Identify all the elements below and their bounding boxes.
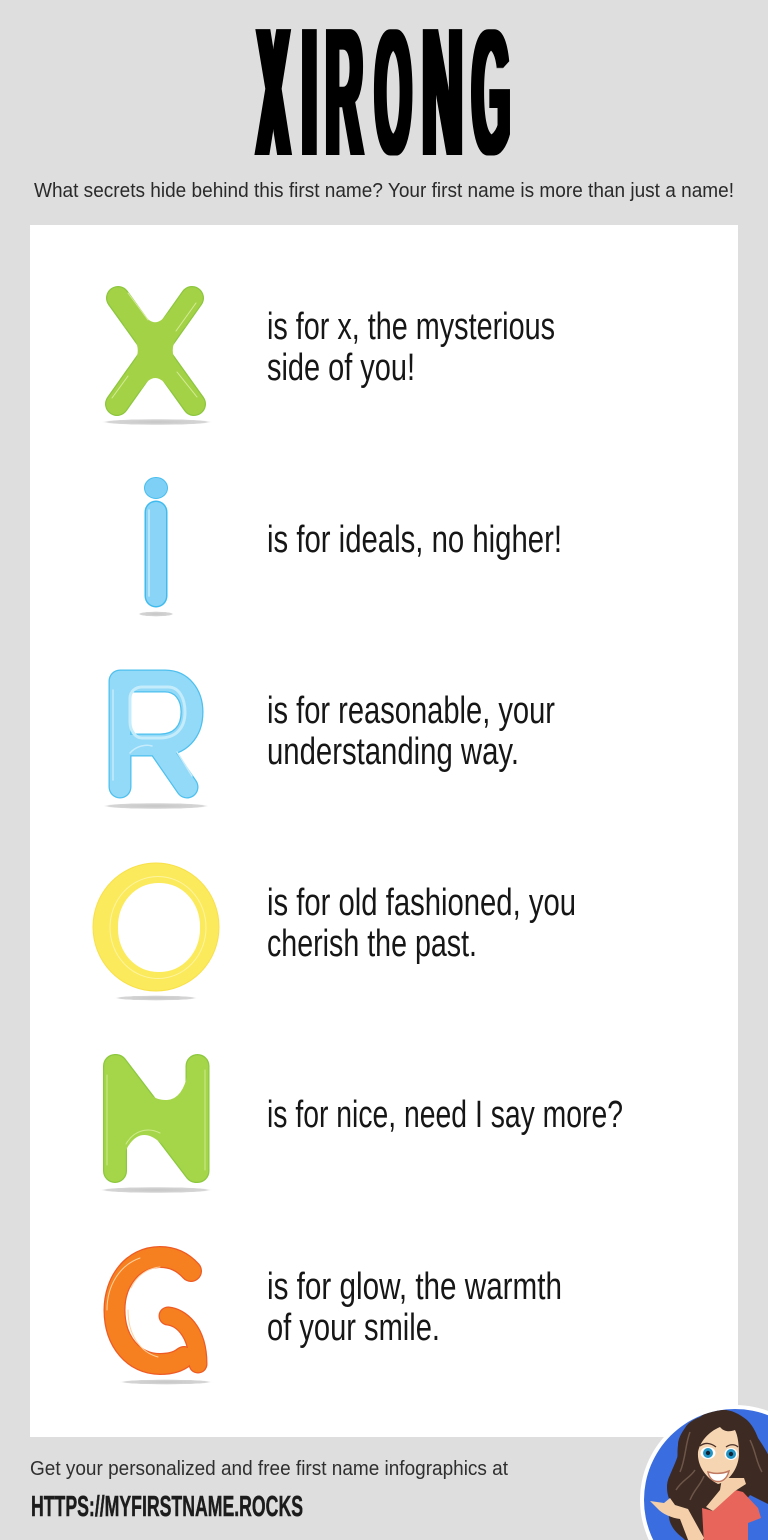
text: G line: is for glow, the warmth — [267, 1266, 562, 1308]
text: I line: is for ideals, no higher! — [267, 519, 562, 561]
text: X line: is for x, the mysterious — [267, 306, 555, 348]
text: R line: is for reasonable, your — [267, 690, 555, 732]
icon: green letter X — [101, 293, 213, 425]
hair strands — [676, 1432, 762, 1500]
avatar: woman in circle — [640, 1405, 768, 1540]
icon: yellow letter O — [93, 863, 219, 1000]
text: O line — [267, 882, 576, 965]
shirt — [702, 1490, 761, 1540]
footer text: Get your personalized and free first name infographics at — [30, 1458, 508, 1480]
hair — [667, 1410, 768, 1540]
eyes — [700, 1443, 738, 1460]
text: G line: of your smile. — [267, 1307, 440, 1349]
footer url: HTTPS://MYFIRSTNAME.ROCKS — [31, 1491, 303, 1523]
icon: blue letter R — [102, 681, 210, 809]
arm and hand — [650, 1498, 704, 1540]
text: R line: understanding way. — [267, 731, 519, 773]
text: N line: is for nice, need I say more? — [267, 1094, 623, 1136]
text: G line — [267, 1266, 562, 1349]
panel: letters — [30, 225, 738, 1437]
title — [258, 0, 510, 195]
icon: orange letter G — [107, 1257, 213, 1384]
subtitle: What secrets hide behind this first name? Your first name is more than just a name! — [34, 180, 734, 202]
text: O line: is for old fashioned, you — [267, 882, 576, 924]
neck — [706, 1478, 746, 1511]
text: X line — [267, 306, 555, 389]
icon: green letter N — [99, 1066, 213, 1193]
smile — [708, 1471, 729, 1482]
text: O line: cherish the past. — [267, 923, 477, 965]
icon: blue letter i — [138, 478, 174, 616]
text: X line: side of you! — [267, 347, 415, 389]
face — [698, 1427, 739, 1484]
text: R line — [267, 690, 555, 773]
